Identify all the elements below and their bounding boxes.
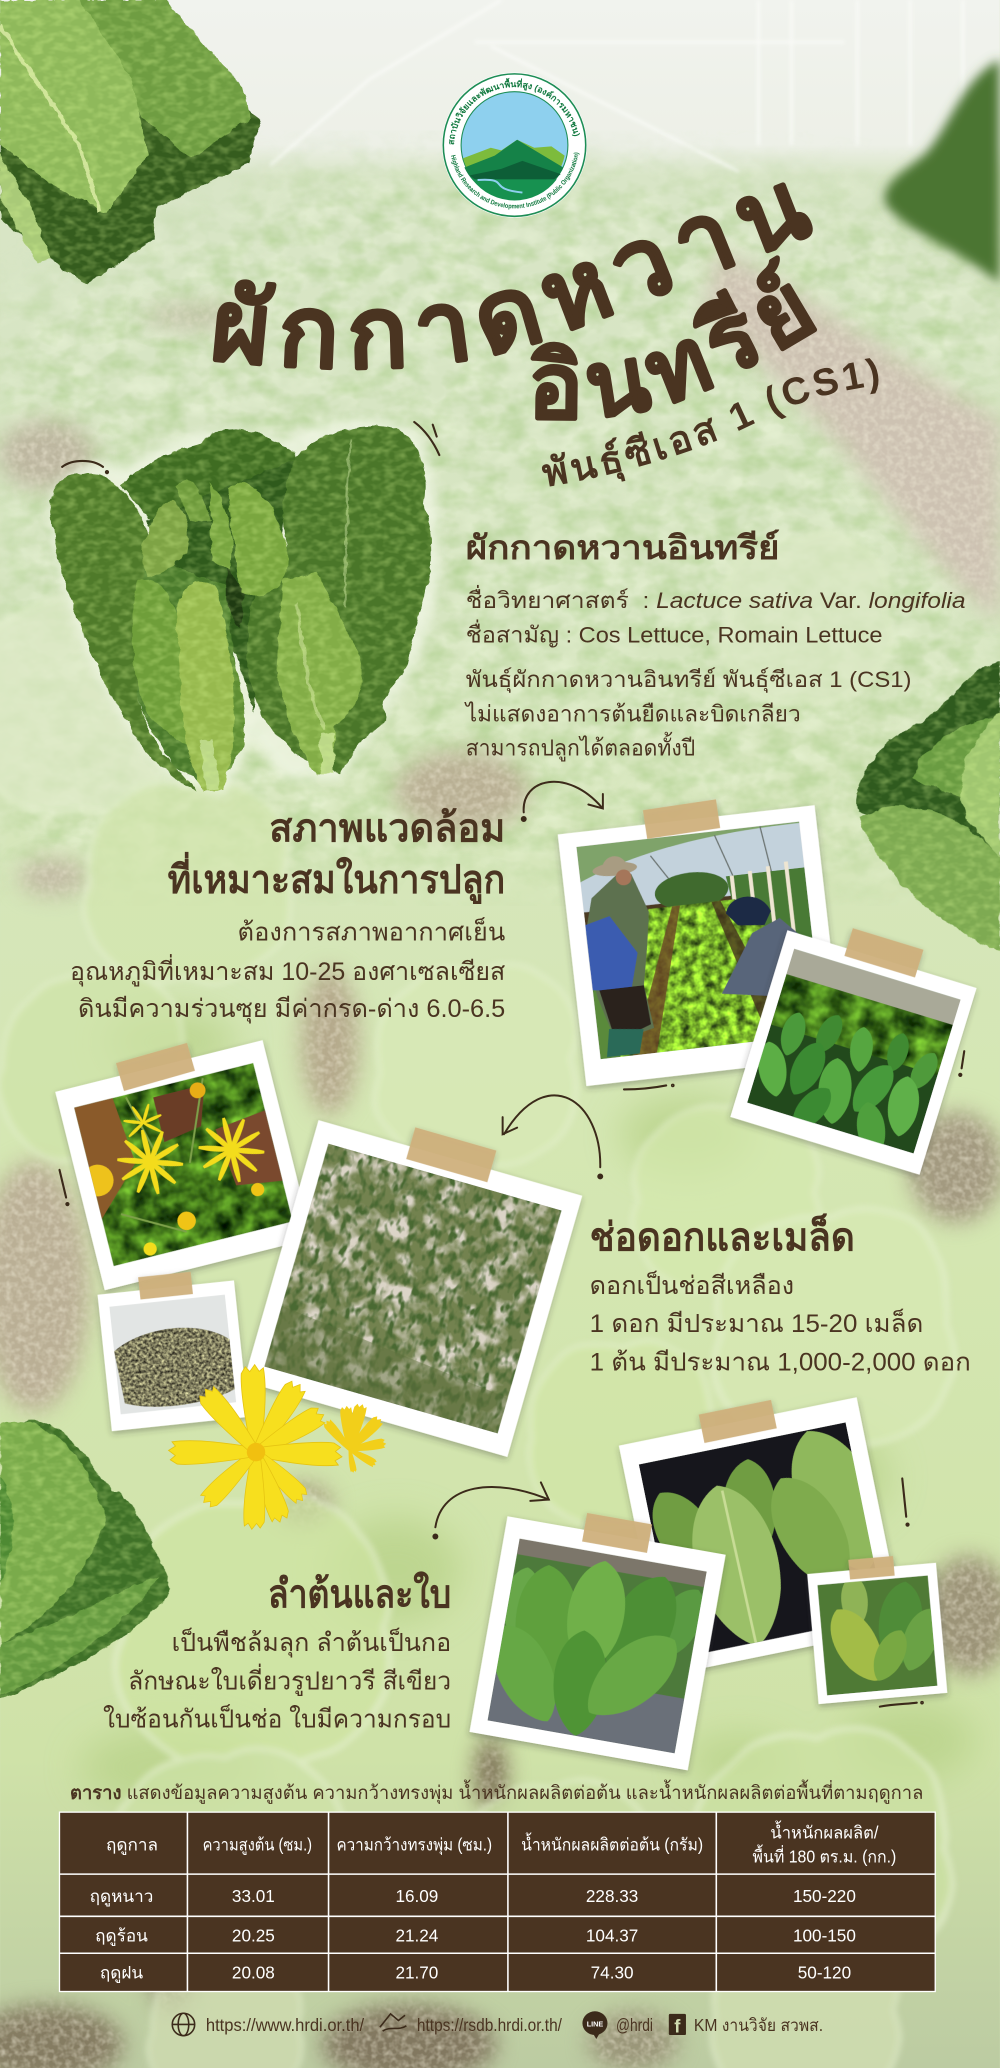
text block: inflorescence and seeds: 1 ดอก มีประมาณ 15-20 เมล็ด [590, 1308, 923, 1338]
greenhouse crop rows [0, 166, 1000, 870]
text block: suitable growing environment: ที่เหมาะสมในการปลูก [168, 851, 505, 904]
icon: RSDB mountain [380, 2014, 406, 2031]
text block: suitable growing environment: ต้องการสภาพอากาศเย็น [238, 916, 505, 946]
text block: description of the variety [464, 529, 966, 762]
table header [106, 1821, 896, 1866]
table row: winter [90, 1886, 856, 1907]
table row: winter: 150-220 [793, 1886, 856, 1906]
table row: winter: 33.01 [232, 1886, 275, 1906]
icon: LINE [582, 2011, 607, 2039]
table row: winter: 16.09 [395, 1886, 438, 1906]
text block: description of the variety: ไม่แสดงอาการต้นยืดและบิดเกลียว [464, 701, 801, 726]
table row: rainy: ฤดูฝน [100, 1962, 143, 1983]
table header: น้ำหนักผลผลิตต่อต้น (กรัม) [521, 1832, 703, 1854]
text block: suitable growing environment: ดินมีความร่วนซุย มีค่ากรด-ด่าง 6.0-6.5 [78, 995, 505, 1024]
icon: globe [172, 2013, 195, 2036]
table row: rainy: 50-120 [798, 1962, 851, 1982]
title: organic cos lettuce, hand lettered: พันธุ์ซีเอส 1 (CS1) [542, 358, 878, 486]
text block: description of the variety: ผักกาดหวานอินทรีย์ [466, 529, 780, 566]
photo: lettuce plant in field [463, 1498, 729, 1770]
decorative ticks [59, 422, 964, 1707]
table caption: ตาราง แสดงข้อมูลความสูงต้น ความกว้างทรงพุ่ม น้ำหนักผลผลิตต่อต้น และน้ำหนักผลผลิตต่อพื้นที่ตามฤดูกาล [70, 1779, 923, 1805]
text block: inflorescence and seeds [590, 1212, 971, 1376]
table row: rainy: 21.70 [395, 1962, 438, 1982]
arrow: stem and leaf to photos [433, 1482, 549, 1538]
table: plant height, width and yield by season [59, 1812, 935, 1992]
table row: winter: 228.33 [586, 1886, 638, 1906]
title: organic cos lettuce, hand lettered: ผักกาดหวาน [212, 182, 813, 370]
icon: LINE: LINE [587, 2019, 603, 2028]
table header: ความสูงต้น (ซม.) [203, 1834, 312, 1855]
text block: description of the variety: สามารถปลูกได้ตลอดทั้งปี [466, 732, 695, 762]
lettuce: right edge [856, 662, 1000, 952]
photo: farmers in greenhouse [556, 788, 843, 1086]
table row: rainy: 20.08 [232, 1962, 275, 1982]
icon: facebook: f [674, 2015, 681, 2036]
tape [848, 1556, 895, 1580]
table row: rainy [100, 1962, 851, 1983]
tape [138, 1272, 193, 1300]
arrow: flowers to photos [503, 1095, 602, 1178]
lettuce: top left corner [0, 0, 261, 285]
photo: young lettuce [806, 1552, 954, 1704]
icon: facebook [669, 2014, 686, 2036]
deeper green shade between leaves [79, 1009, 976, 1807]
table header: น้ำหนักผลผลิต/ [770, 1821, 879, 1843]
photo: lettuce rows in greenhouse [730, 910, 983, 1177]
tape [699, 1400, 777, 1443]
table header: ฤดูกาล [106, 1834, 158, 1855]
text block: suitable growing environment: อุณหภูมิที่เหมาะสม 10-25 องศาเซลเซียส [70, 954, 505, 987]
photo: yellow lettuce flowers [51, 1025, 312, 1290]
arrow: environment to photos [522, 782, 603, 821]
text block: description of the variety: ชื่อสามัญ : Cos Lettuce, Romain Lettuce [466, 618, 882, 647]
text block: suitable growing environment [70, 806, 505, 1024]
lettuce: left lower edge [0, 1421, 172, 1699]
text block: stem and leaves: เป็นพืชล้มลุก ลำต้นเป็นกอ [172, 1627, 451, 1658]
text block: stem and leaves: ใบซ้อนกันเป็นช่อ ใบมีความกรอบ [103, 1704, 451, 1734]
photo: whole cos lettuce heads [50, 419, 439, 797]
photo: lettuce seeds [96, 1267, 248, 1431]
text block: stem and leaves [103, 1571, 451, 1734]
logo: HRDI: สถาบันวิจัยและพัฒนาพื้นที่สูง (องค์การมหาชน) [449, 78, 580, 144]
tape [116, 1043, 195, 1091]
large pale lettuce leaves [0, 532, 952, 2068]
table row: summer: 20.25 [232, 1925, 275, 1945]
photo: fluffy seed heads [244, 1101, 588, 1457]
photo: lettuce heads on black [616, 1396, 894, 1674]
footer: links: https://www.hrdi.or.th/ [206, 2015, 364, 2035]
table row: summer: ฤดูร้อน [95, 1925, 148, 1946]
lettuce: top right blurred [885, 59, 1000, 284]
tape [582, 1513, 652, 1553]
logo: HRDI: Highland Research and Development Institute (Public Organization) [451, 152, 580, 210]
table row: winter: ฤดูหนาว [90, 1886, 153, 1907]
text block: stem and leaves: ลักษณะใบเดี่ยวรูปยาวรี สีเขียว [128, 1663, 451, 1696]
icon: yellow flowers [169, 1364, 387, 1530]
tape [643, 799, 720, 839]
footer: links: https://rsdb.hrdi.or.th/ [417, 2015, 562, 2035]
tape [844, 928, 923, 977]
footer: links: @hrdi [616, 2015, 653, 2035]
table header: พื้นที่ 180 ตร.ม. (กก.) [753, 1844, 896, 1866]
footer: links [172, 2011, 823, 2039]
table row: summer: 104.37 [586, 1925, 638, 1945]
title: organic cos lettuce, hand lettered [212, 108, 878, 486]
text block: inflorescence and seeds: ดอกเป็นช่อสีเหลือง [590, 1270, 794, 1300]
title: organic cos lettuce, hand lettered: อินทรีย์ [530, 255, 818, 421]
table row: summer [95, 1925, 856, 1946]
table row: summer: 21.24 [395, 1925, 439, 1945]
table row: rainy: 74.30 [591, 1962, 634, 1982]
text block: inflorescence and seeds: 1 ต้น มีประมาณ 1,000-2,000 ดอก [590, 1348, 971, 1376]
table row: summer: 100-150 [793, 1925, 856, 1945]
text block: description of the variety: ชื่อวิทยาศาสตร์ : Lactuce sativa Var. longifolia [466, 584, 966, 613]
footer: links: KM งานวิจัย สวพส. [694, 2015, 823, 2035]
text block: description of the variety: พันธุ์ผักกาดหวานอินทรีย์ พันธุ์ซีเอส 1 (CS1) [466, 667, 911, 693]
tape [406, 1127, 496, 1182]
text block: inflorescence and seeds: ช่อดอกและเมล็ด [590, 1212, 855, 1259]
text block: suitable growing environment: สภาพแวดล้อม [269, 806, 505, 850]
logo: HRDI [442, 72, 587, 218]
text block: stem and leaves: ลำต้นและใบ [268, 1571, 451, 1617]
table header: ความกว้างทรงพุ่ม (ซม.) [336, 1834, 492, 1855]
